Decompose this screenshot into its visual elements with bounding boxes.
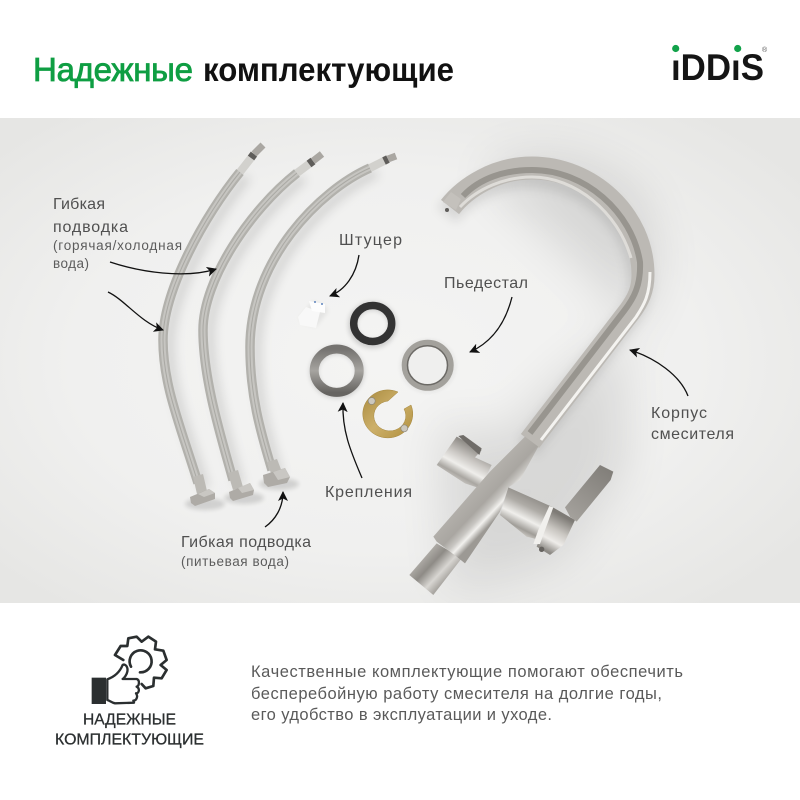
label: pedestal: Пьедестал: [444, 275, 528, 292]
faucet: body, branches and handle: [409, 435, 613, 595]
label: flexible hose hot/cold: (горячая/холодная: [53, 238, 182, 253]
label: flexible hose hot/cold: Гибкая: [53, 196, 105, 213]
arrows: [108, 255, 688, 527]
hoses: flexible connectors: [163, 145, 396, 488]
icon: gear and thumbs up: [92, 637, 167, 704]
label: flexible hose hot/cold: вода): [53, 256, 89, 271]
label: fitting: Штуцер: [339, 232, 402, 249]
label: flexible hose drinking water: Гибкая подводка: [181, 534, 311, 551]
icon caption: [55, 712, 204, 748]
icon caption: НАДЕЖНЫЕ: [83, 712, 176, 728]
label: mounts: Крепления: [325, 484, 412, 501]
label: flexible hose drinking water: [181, 534, 311, 569]
text block: description: его удобство в эксплуатации и уходе.: [251, 706, 552, 724]
label: faucet body: [651, 405, 734, 443]
title: комплектующие: [203, 51, 454, 88]
text block: description: Качественные комплектующие помогают обеспечить: [251, 663, 683, 681]
logo: IDDIS: ıDDıS: [671, 47, 764, 88]
faucet: soft shadow: [440, 155, 660, 590]
ring: brass mount: [363, 390, 413, 438]
faucet: spout: [443, 168, 650, 449]
fitting: white plastic: [298, 301, 328, 328]
ring: black gasket: [352, 306, 392, 344]
logo: IDDIS: ®: [762, 46, 768, 54]
ring: pedestal: [405, 343, 451, 388]
title: Надежные: [33, 51, 193, 88]
label: faucet body: смесителя: [651, 426, 734, 443]
label: faucet body: Корпус: [651, 405, 707, 422]
hose nuts: [185, 459, 299, 510]
text block: description: [251, 663, 683, 724]
label: flexible hose drinking water: (питьевая вода): [181, 554, 289, 569]
panel: product photo: [0, 118, 800, 603]
ring: steel washer: [314, 349, 360, 394]
text block: description: бесперебойную работу смесителя на долгие годы,: [251, 685, 662, 703]
icon caption: КОМПЛЕКТУЮЩИЕ: [55, 732, 204, 748]
label: flexible hose hot/cold: подводка: [53, 219, 128, 236]
label: flexible hose hot/cold: [53, 196, 182, 271]
